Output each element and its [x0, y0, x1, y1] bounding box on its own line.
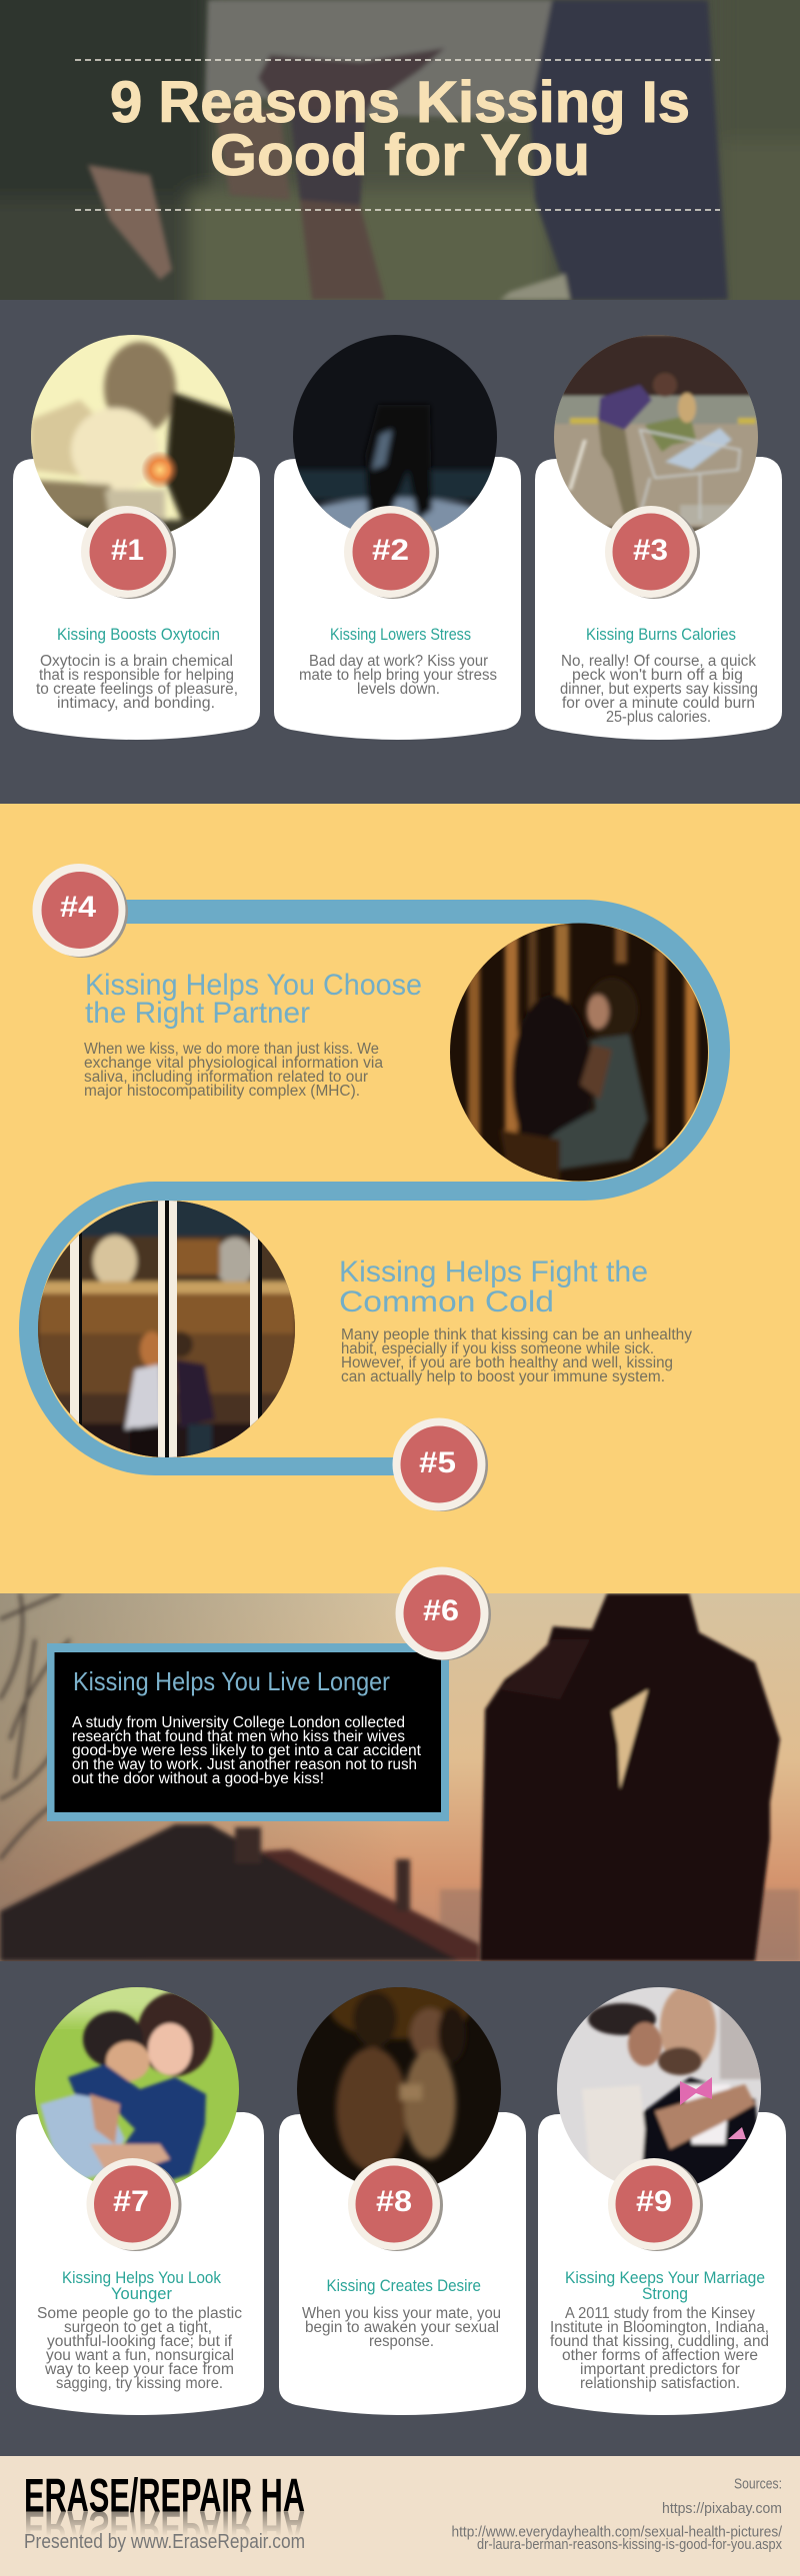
sources: http://www.everydayhealth.com/sexual-health-pictures/: [452, 2525, 783, 2541]
panel: reason 7: [16, 1969, 264, 2415]
body text: other forms of affection were: [562, 2347, 758, 2364]
body text: that is responsible for helping: [39, 667, 234, 684]
body text: surgeon to get a tight,: [64, 2319, 212, 2336]
badge #1: [81, 506, 176, 599]
body text: When you kiss your mate, you: [302, 2305, 501, 2322]
body text: reason 6: A study from University College London collected: [72, 1714, 405, 1731]
body text: reason 6: out the door without a good-bye kiss!: [72, 1770, 324, 1787]
body text: [302, 2305, 501, 2350]
body text: A 2011 study from the Kinsey: [565, 2305, 755, 2322]
photo: couple with shopping cart: [553, 335, 759, 541]
body text: reason 6: [72, 1714, 422, 1787]
body text: reason 5: can actually help to boost your immune system.: [341, 1368, 665, 1385]
background: dark section bottom: [0, 1961, 800, 2456]
badge #8: #8: [376, 2185, 412, 2218]
body text: intimacy, and bonding.: [57, 695, 215, 712]
presented by: Presented by www.EraseRepair.com: [24, 2531, 305, 2553]
photo: couple in warm light: [296, 1979, 502, 2192]
panel: header: [0, 0, 800, 330]
body text: found that kissing, cuddling, and: [550, 2333, 769, 2350]
panel: reason 9: [538, 1985, 786, 2415]
body text: reason 6: good-bye were less likely to get into a car accident: [72, 1742, 422, 1759]
panel: reason 8: [279, 1979, 526, 2415]
heading: title: [110, 70, 690, 188]
panel: reason 3: [535, 335, 782, 740]
heading: reason 5: [339, 1256, 648, 1318]
body text: dinner, but experts say kissing: [560, 681, 758, 698]
body text: Some people go to the plastic: [37, 2305, 242, 2322]
badge #3: #3: [633, 534, 668, 567]
body text: way to keep your face from: [44, 2361, 234, 2378]
body text: reason 6: on the way to work. Just another reason not to rush: [72, 1756, 417, 1773]
body text: reason 5: Many people think that kissing can be an unhealthy: [341, 1326, 692, 1343]
heading: Kissing Burns Calories: [586, 625, 736, 644]
heading: Younger: [111, 2284, 172, 2303]
body text: reason 4: [84, 1041, 383, 1100]
body text: 25-plus calories.: [606, 709, 711, 726]
heading: reason 5: Kissing Helps Fight the: [339, 1256, 648, 1288]
body text: reason 6: research that found that men who kiss their wives: [72, 1728, 405, 1745]
heading: Kissing Helps You Look: [62, 2268, 221, 2287]
body text: peck won't burn off a big: [572, 667, 743, 684]
body text: mate to help bring your stress: [299, 667, 497, 684]
heading: reason 4: [85, 969, 422, 1030]
heading: title: Good for You: [210, 123, 590, 188]
body text: Bad day at work? Kiss your: [309, 653, 488, 670]
badge #8: [348, 2158, 443, 2251]
dashed rule bottom: [75, 209, 720, 211]
photo: couple in sunlight: [30, 335, 240, 545]
heading: [62, 2268, 221, 2303]
blue connector path: [19, 900, 730, 1475]
heading: reason 6: Kissing Helps You Live Longer: [73, 1666, 390, 1696]
badge #6: #6: [423, 1594, 459, 1627]
body text: reason 4: exchange vital physiological information via: [84, 1055, 383, 1072]
sources: https://pixabay.com: [662, 2501, 782, 2517]
body text: sagging, try kissing more.: [56, 2375, 223, 2392]
footer background: [0, 2456, 800, 2576]
photo: couple in forest: [450, 923, 708, 1185]
body text: you want a fun, nonsurgical: [46, 2347, 234, 2364]
sources: Sources:: [734, 2477, 782, 2493]
heading: reason 5: Common Cold: [339, 1286, 554, 1318]
heading: Strong: [642, 2284, 688, 2303]
photo: couple silhouette at sunset: [0, 1593, 800, 1961]
body text: reason 5: However, if you are both healthy and well, kissing: [341, 1354, 673, 1371]
body text: reason 5: [341, 1326, 692, 1385]
body text: reason 4: major histocompatibility complex (MHC).: [84, 1083, 360, 1100]
photo: couple on grass: [35, 1987, 239, 2183]
badge #7: #7: [113, 2185, 149, 2218]
body text: Oxytocin is a brain chemical: [40, 653, 233, 670]
photo: couple at carousel: [38, 1201, 296, 1459]
card: [538, 2112, 786, 2415]
body text: reason 4: saliva, including information related to our: [84, 1069, 368, 1086]
body text: No, really! Of course, a quick: [561, 653, 756, 670]
panel: reason 1: [13, 335, 260, 740]
card: [13, 457, 260, 740]
body text: begin to awaken your sexual: [305, 2319, 499, 2336]
body text: [560, 653, 758, 726]
heading: reason 4: Kissing Helps You Choose: [85, 969, 422, 1002]
background: dark section top: [0, 300, 800, 804]
text box: [47, 1643, 449, 1821]
heading: Kissing Keeps Your Marriage: [565, 2268, 765, 2287]
panel: reason 2: [274, 335, 521, 740]
heading: Kissing Boosts Oxytocin: [57, 625, 220, 644]
badge #6: [396, 1567, 491, 1660]
body text: Institute in Bloomington, Indiana,: [550, 2319, 769, 2336]
badge #9: [608, 2158, 703, 2251]
heading: [565, 2268, 765, 2303]
body text: response.: [369, 2333, 434, 2350]
card: [16, 2112, 264, 2415]
heading: reason 4: the Right Partner: [85, 997, 310, 1030]
body text: for over a minute could burn: [562, 695, 755, 712]
panel: footer: [0, 2456, 800, 2576]
badge #2: #2: [372, 534, 409, 567]
heading: title: 9 Reasons Kissing Is: [110, 70, 690, 135]
sources: [452, 2477, 783, 2553]
photo: couple in the rain: [292, 335, 498, 542]
badge #9: #9: [636, 2185, 672, 2218]
badge #5: #5: [419, 1446, 456, 1479]
body text: to create feelings of pleasure,: [36, 681, 238, 698]
badge #1: #1: [111, 534, 144, 567]
panel: reasons 4 and 5: [19, 864, 730, 1511]
body text: levels down.: [357, 681, 440, 698]
badge #4: [32, 864, 128, 958]
panel: reason 6: [0, 1567, 800, 1961]
logo reflection: ERASE/REPAIR HA: [24, 2501, 305, 2555]
badge #3: [605, 506, 700, 599]
body text: [36, 653, 238, 712]
dashed rule top: [75, 59, 720, 61]
body text: youthful-looking face; but if: [47, 2333, 233, 2350]
badge #5: [392, 1417, 488, 1511]
card: [279, 2112, 526, 2415]
card: [274, 457, 521, 740]
badge #2: [344, 506, 439, 599]
body text: [550, 2305, 769, 2392]
heading: Kissing Creates Desire: [326, 2276, 481, 2295]
body text: important predictors for: [580, 2361, 740, 2378]
logo: Erase/Repair HA: ERASE/REPAIR HA: [24, 2469, 305, 2521]
heading: Kissing Lowers Stress: [330, 625, 471, 644]
photo: wedding kiss: [557, 1987, 761, 2183]
header photo: legs on grass: [0, 0, 800, 330]
body text: [37, 2305, 242, 2392]
body text: relationship satisfaction.: [580, 2375, 740, 2392]
body text: [299, 653, 497, 698]
badge #7: [86, 2158, 182, 2251]
body text: reason 5: habit, especially if you kiss someone while sick.: [341, 1340, 654, 1357]
background: yellow section: [0, 804, 800, 1593]
card: [535, 457, 782, 740]
body text: reason 4: When we kiss, we do more than just kiss. We: [84, 1041, 379, 1058]
badge #4: #4: [60, 891, 96, 924]
